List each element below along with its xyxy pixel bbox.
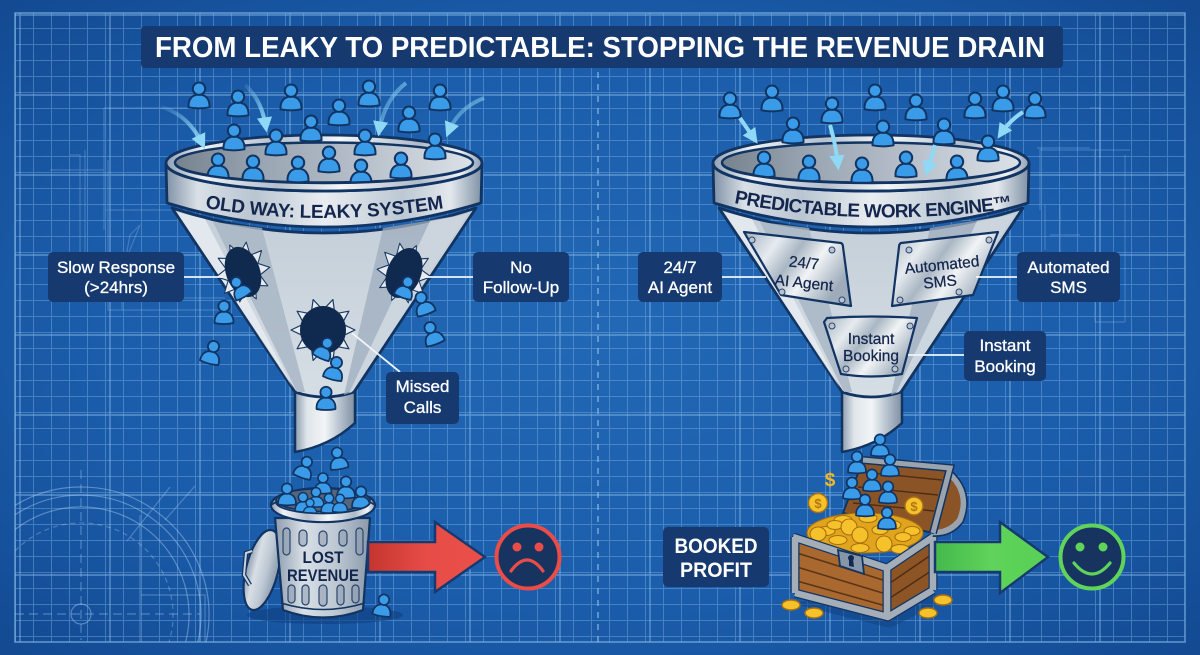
people entering funnel	[188, 80, 451, 185]
callout: booked profit	[663, 527, 769, 587]
panel: booked profit outcome	[663, 434, 1124, 628]
callout: instant booking	[964, 331, 1046, 381]
metal plate: automated SMS: Automated	[904, 253, 980, 278]
metal straps	[793, 537, 933, 617]
chest side face	[887, 537, 933, 617]
callout: slow response	[48, 252, 184, 302]
callout: automated SMS: SMS	[1050, 278, 1087, 297]
callout: automated SMS: Automated	[1027, 258, 1110, 277]
callout: no follow-up: Follow-Up	[483, 278, 559, 297]
people leaking from holes	[200, 273, 445, 410]
chest lid, open	[843, 460, 967, 536]
trash can label	[287, 549, 359, 585]
dollar sign and coins: $	[814, 496, 822, 511]
icon: happy face	[1060, 526, 1124, 588]
gold pile	[807, 513, 923, 554]
metal plate: instant booking: Booking	[843, 348, 899, 365]
callout: booked profit: BOOKED	[674, 535, 758, 558]
metal plate: automated SMS: SMS	[922, 272, 958, 293]
callout: instant booking: Booking	[974, 357, 1036, 376]
hole: slow response	[211, 239, 275, 305]
title: FROM LEAKY TO PREDICTABLE: STOPPING THE REVENUE DRAIN	[155, 32, 1045, 64]
flow arrows into funnel	[161, 83, 484, 145]
chest shadow	[790, 588, 950, 628]
callout: missed calls	[386, 372, 459, 424]
metal plate: AI agent: AI Agent	[774, 272, 835, 295]
icon: sad face	[496, 526, 560, 588]
connector lines	[722, 277, 1017, 355]
callout: no follow-up	[473, 252, 569, 302]
metal plate: automated SMS	[892, 232, 998, 306]
funnel front lip	[166, 163, 482, 191]
panel: old way leaky funnel	[48, 80, 569, 454]
funnel front lip	[713, 163, 1029, 191]
people in trash	[278, 446, 370, 516]
trash rim front	[271, 502, 375, 522]
callout: slow response: (>24hrs)	[84, 278, 148, 297]
metal plate: AI agent: 24/7	[788, 253, 820, 274]
panel: lost revenue outcome	[237, 446, 560, 624]
dollar sign and coins: $	[825, 470, 836, 491]
callout: booked profit: PROFIT	[680, 559, 752, 582]
arrow: red	[368, 522, 485, 592]
panel: predictable work engine funnel	[638, 84, 1120, 454]
keyhole lock	[838, 550, 864, 574]
chest front face	[793, 537, 888, 617]
callout: missed calls: Calls	[404, 398, 441, 417]
dollar sign and coins	[782, 470, 952, 618]
callout: no follow-up: No	[510, 258, 532, 277]
trash can label: LOST	[302, 549, 344, 567]
metal plate: instant booking	[824, 316, 917, 376]
icon: silver funnel, left	[166, 135, 482, 452]
arrow: green	[935, 522, 1048, 593]
people entering funnel	[719, 84, 1046, 183]
people dropping into chest	[843, 434, 899, 529]
dollar sign and coins: $	[910, 499, 918, 514]
icon: fallen person	[372, 593, 394, 618]
funnel label: old way: OLD WAY: LEAKY SYSTEM	[206, 196, 443, 218]
hole: no follow-up	[373, 241, 435, 305]
icon: trash can	[237, 488, 403, 624]
callout: AI agent: 24/7	[663, 258, 697, 277]
callout: slow response: Slow Response	[57, 258, 175, 277]
callout: AI agent: AI Agent	[648, 278, 712, 297]
callout: instant booking: Instant	[979, 336, 1031, 355]
callout: AI agent	[638, 252, 722, 302]
icon: silver funnel, right	[713, 135, 1029, 452]
hole: missed calls	[291, 300, 355, 360]
funnel label: predictable work engine: PREDICTABLE WORK ENGINE™	[735, 190, 1010, 218]
center divider	[597, 72, 599, 642]
trash can label: REVENUE	[287, 567, 359, 585]
connector lines	[184, 277, 473, 372]
metal plate: AI agent	[744, 232, 851, 306]
flow arrows into funnel	[740, 112, 1023, 172]
metal plate: instant booking: Instant	[848, 331, 895, 348]
icon: treasure chest	[782, 434, 967, 628]
callout: missed calls: Missed	[396, 377, 449, 396]
callout: automated SMS	[1017, 252, 1120, 302]
